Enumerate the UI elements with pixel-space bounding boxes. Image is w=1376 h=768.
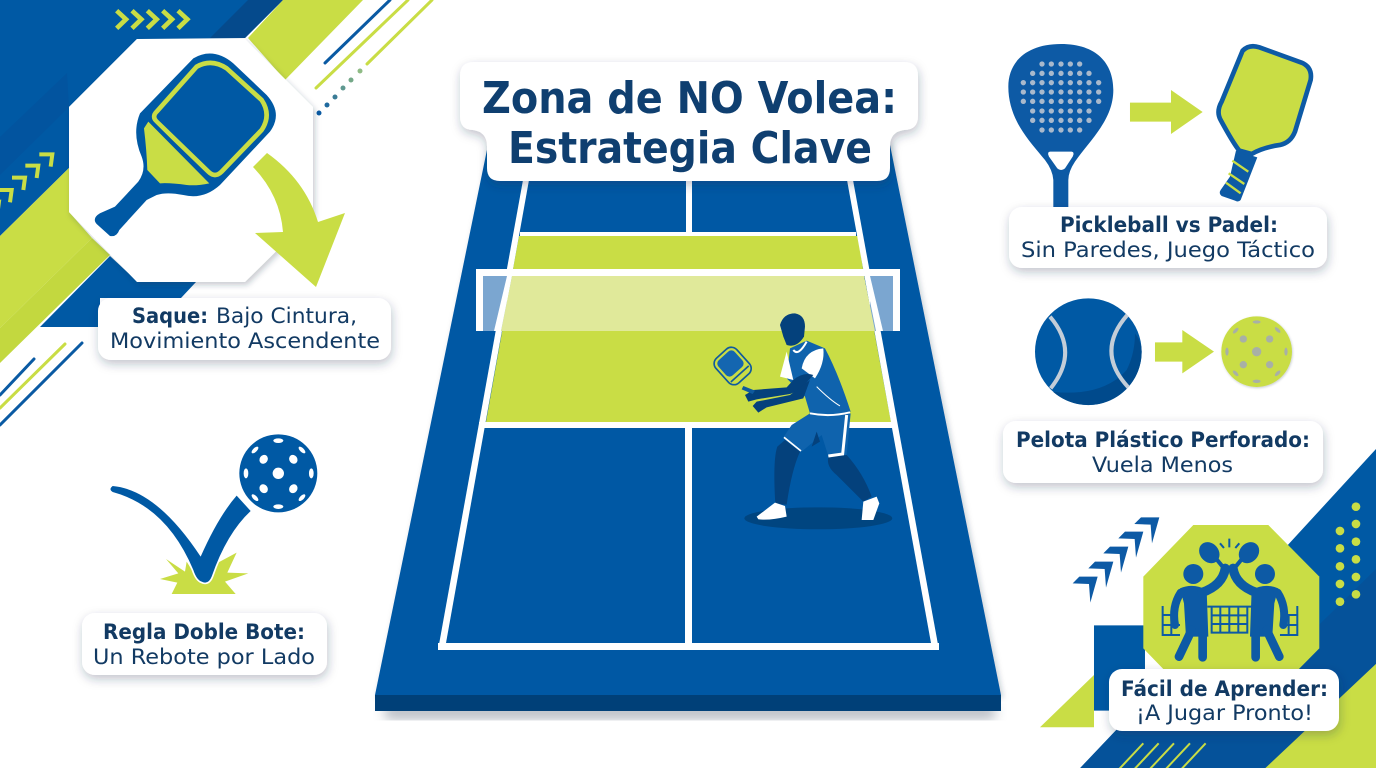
label: saque [98,298,391,360]
title [460,62,918,181]
icon: net [1163,606,1297,635]
court lines [438,180,939,650]
icon: padel racket [1008,44,1113,208]
icons: tennis ball to perforated ball [1035,298,1292,405]
label: facil de aprender: Fácil de Aprender: [1121,677,1328,701]
icons: padel racket to pickleball paddle [1008,44,1311,208]
net [476,269,900,331]
octagon [1143,525,1319,700]
label: pickleball vs padel: Sin Paredes, Juego Táctico [1021,238,1315,262]
label: saque: Saque: [132,304,208,328]
decoration: lime chevrons left [0,154,52,214]
decoration: lime dots [1336,502,1360,606]
label: regla doble bote [82,613,327,675]
label: regla doble bote: Un Rebote por Lado [93,645,315,669]
label: facil de aprender: ¡A Jugar Pronto! [1136,701,1313,725]
decoration: lime hatch [1118,743,1206,768]
decoration: lime chevrons top [117,11,187,28]
panel: court [375,140,1001,719]
kitchen zone near [486,276,891,422]
panel: serve octagon [69,39,345,287]
arrow: downward curved lime arrow [253,153,345,287]
icon: player right [1233,538,1284,657]
decoration: top-left geometric panel [0,0,432,425]
icon: paddle [95,54,276,236]
label: pelota: Vuela Menos [1092,453,1233,477]
icon: double bounce ball [110,434,317,594]
title: Estrategia Clave [508,123,872,174]
label: pelota: Pelota Plástico Perforado: [1016,428,1310,452]
player [711,313,892,529]
arrow: lime right [1155,330,1214,373]
label: facil de aprender [1109,669,1339,731]
label: regla doble bote: Regla Doble Bote: [103,620,305,644]
icon: perforated lime ball [1221,316,1292,387]
panel: easy to learn, geometric background and icon [1040,448,1376,768]
icon: tennis ball [1035,298,1142,405]
label: pickleball vs padel: Pickleball vs Padel: [1060,213,1278,237]
icon: sparks [1220,539,1239,548]
icon: pickleball paddle [1219,46,1311,202]
label: pelota [1003,421,1323,483]
arrow: lime right [1130,90,1203,134]
title: Zona de NO Volea: [482,73,897,124]
icon: player left [1174,538,1225,657]
kitchen zone far [513,236,863,269]
label: saque: Movimiento Ascendente [110,329,380,353]
label: saque: Bajo Cintura, [216,304,357,328]
label: pickleball vs padel [1009,207,1327,268]
decoration: blue chevrons [1073,517,1159,603]
icon: player paddle [711,344,755,394]
